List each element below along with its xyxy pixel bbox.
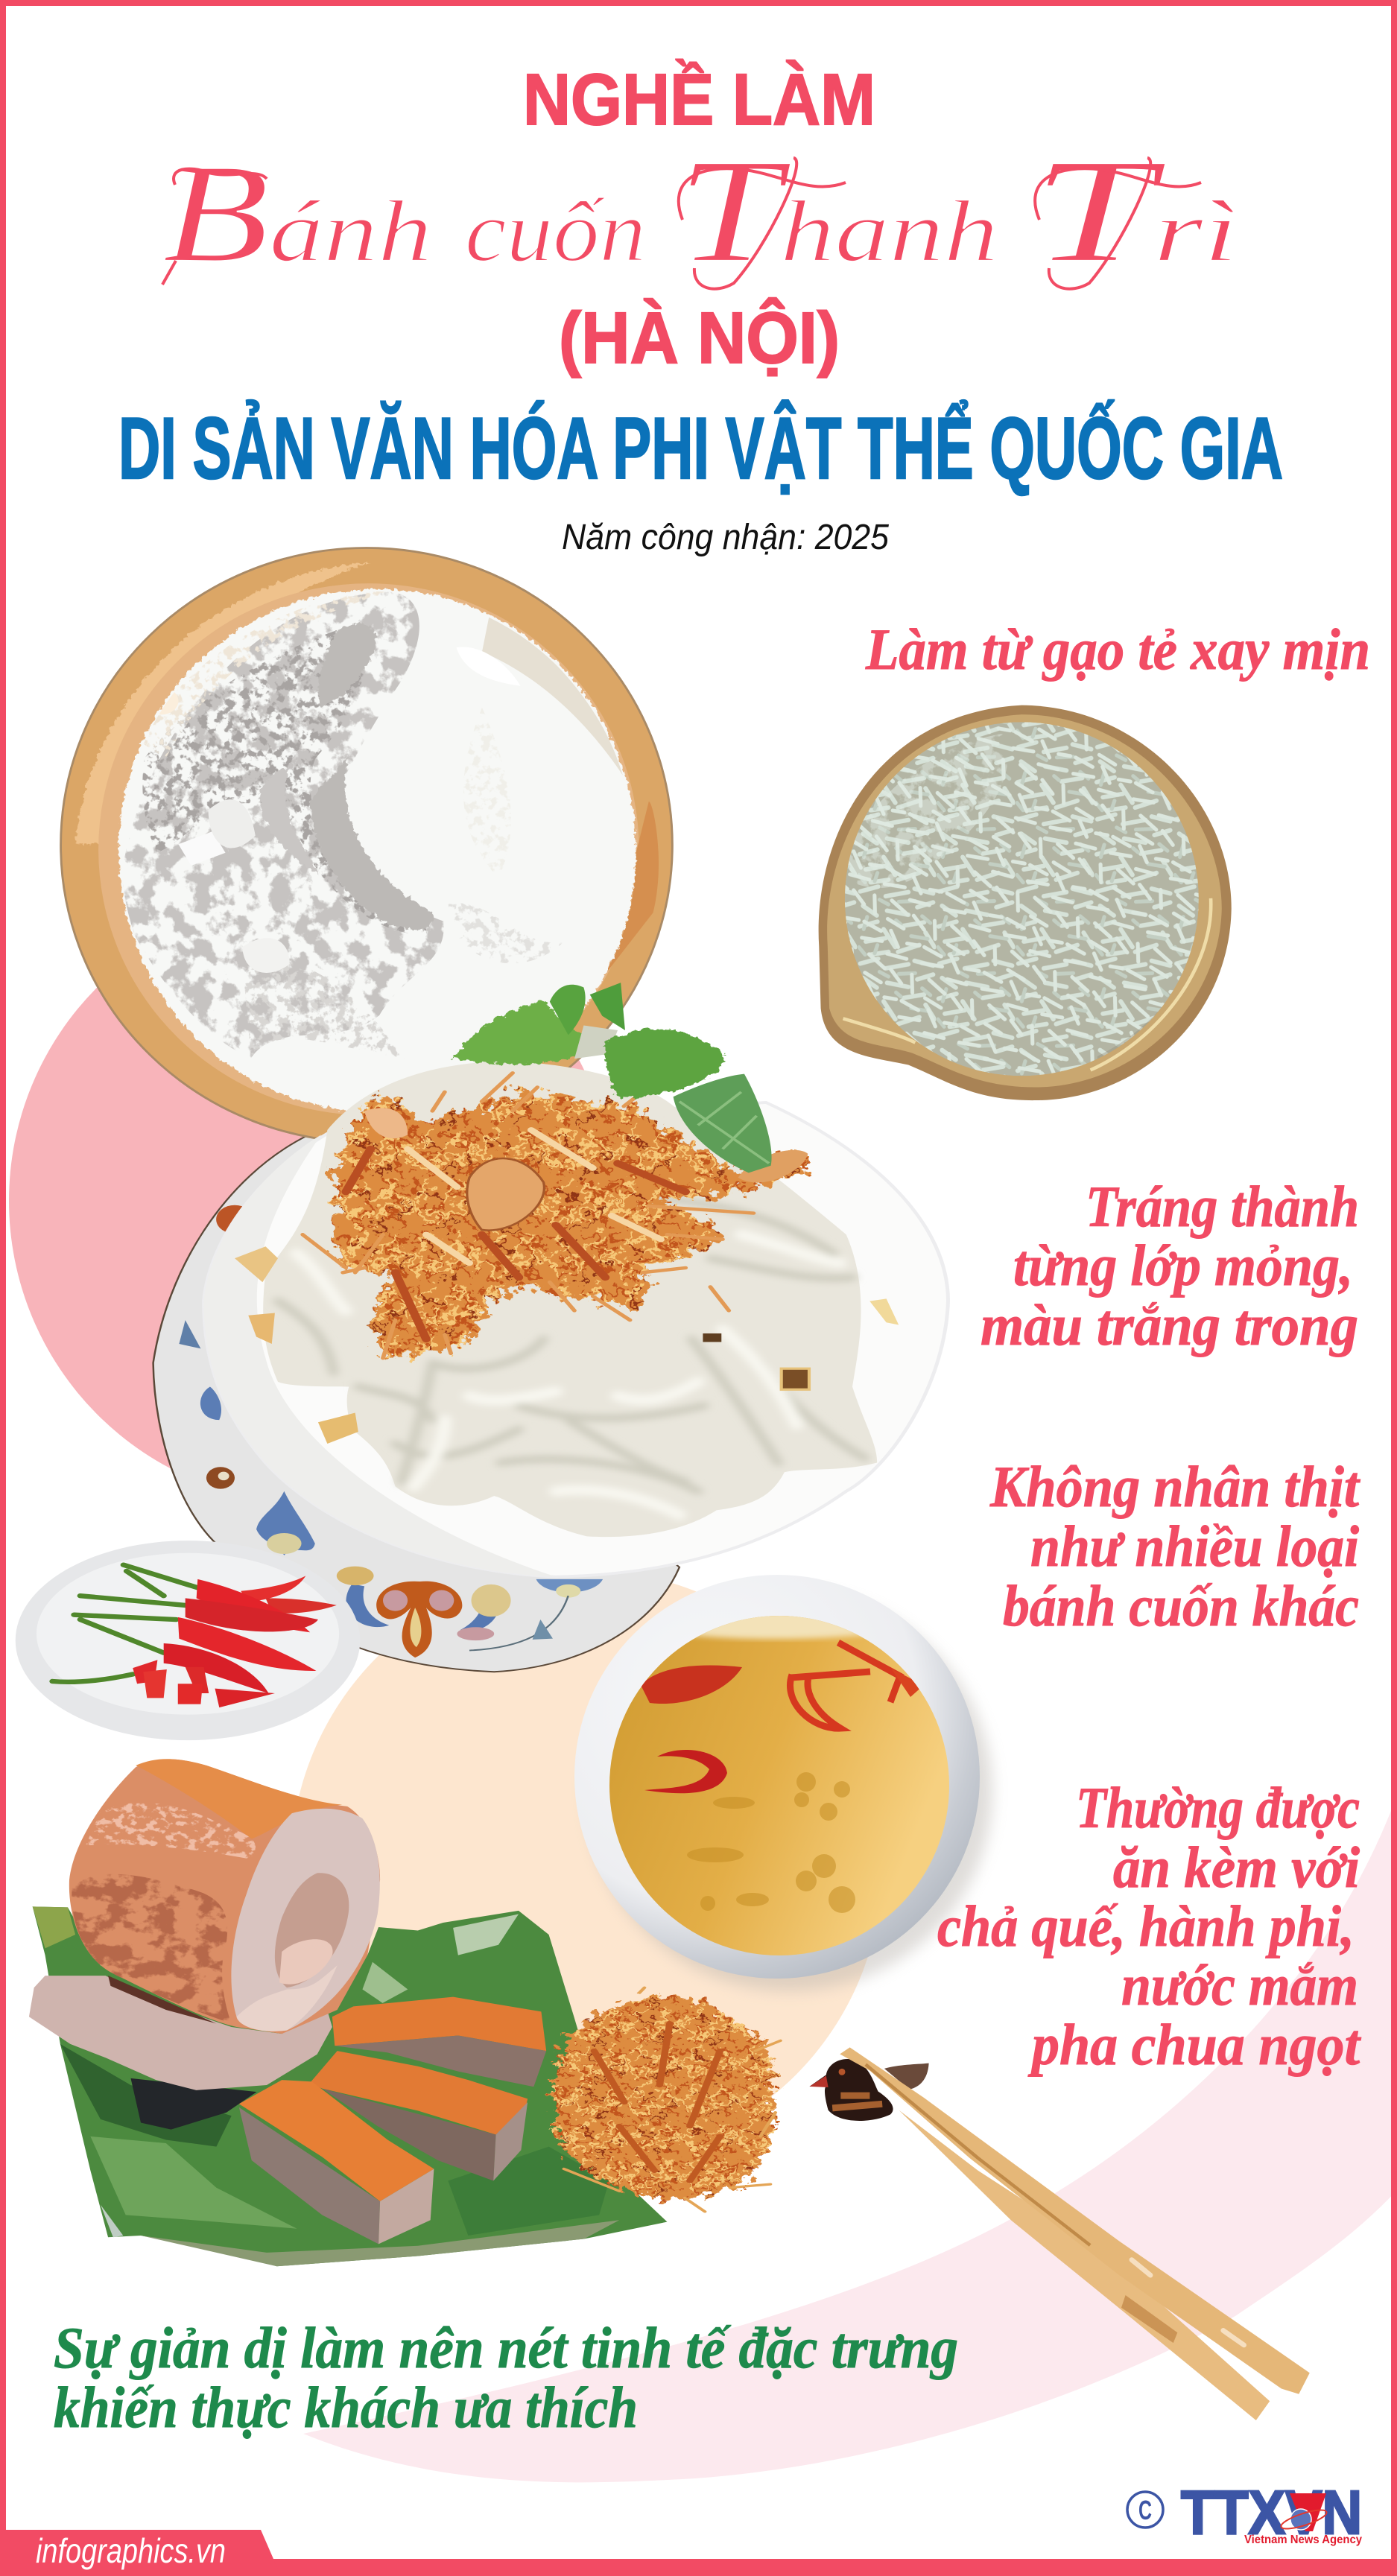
info label: no meat filling: bánh cuốn khác xyxy=(1003,1573,1359,1638)
chopstick rest and chopsticks xyxy=(809,2047,1310,2420)
fried shallots xyxy=(302,1073,806,1358)
script title: Bánh cuốn Thanh Trì: Thanh xyxy=(677,129,998,294)
info label: eaten with: ăn kèm với xyxy=(1113,1835,1360,1900)
banana leaf xyxy=(33,1906,667,2266)
chili plate xyxy=(16,1541,360,1740)
dipping sauce bowl xyxy=(574,1575,992,1991)
title line: Hà Nội: (HÀ NỘI) xyxy=(559,297,840,378)
fish sauce xyxy=(609,1616,949,1955)
background shape: peach circle xyxy=(291,1570,882,2162)
info label: thin layers xyxy=(981,1174,1359,1357)
info label: eaten with: pha chua ngọt xyxy=(1027,2012,1361,2077)
info label: eaten with: nước mắm xyxy=(1121,1952,1358,2017)
info label: eaten with: chả quế, hành phi, xyxy=(937,1894,1355,1958)
info label: no meat filling: Không nhân thịt xyxy=(989,1454,1360,1519)
info label: eaten with xyxy=(937,1775,1361,2077)
info label: rice: Làm từ gạo tẻ xay mịn xyxy=(865,617,1370,682)
agency wordmark: TTXVN xyxy=(1181,2478,1362,2547)
closing statement: khiến thực khách ưa thích xyxy=(54,2375,638,2440)
noodle rolls xyxy=(263,1061,877,1537)
duck rest xyxy=(809,2059,929,2121)
closing statement xyxy=(54,2315,958,2440)
roll body xyxy=(69,1759,380,2034)
copyright mark: C xyxy=(1138,2495,1152,2525)
garnish bits xyxy=(235,1150,899,1444)
fried shallots pile xyxy=(553,1987,781,2212)
script title: Bánh cuốn Thanh Trì xyxy=(162,129,1239,294)
background shape: pale pink crescent xyxy=(303,1795,1397,2482)
info label: thin layers: Tráng thành xyxy=(1086,1174,1359,1239)
rice bowl xyxy=(819,705,1232,1100)
website: infographics.vn xyxy=(36,2531,226,2570)
copyright mark xyxy=(1127,2492,1163,2528)
roll cut face xyxy=(231,1809,380,2031)
info label: eaten with: Thường được xyxy=(1076,1775,1360,1840)
script title: Bánh cuốn Thanh Trì: T rì xyxy=(1032,129,1239,294)
roll slice xyxy=(29,1976,332,2090)
info label: no meat filling xyxy=(989,1454,1360,1638)
logo: TTXVN xyxy=(1127,2478,1362,2547)
background shape: pink circle xyxy=(9,898,614,1503)
script title: Bánh cuốn Thanh Trì: cuốn xyxy=(465,183,646,280)
cake pieces xyxy=(239,1997,546,2244)
flour bowl xyxy=(61,548,672,1142)
script title: Bánh cuốn Thanh Trì: Bánh xyxy=(162,136,432,292)
chả quế on banana leaf xyxy=(29,1759,667,2266)
chilies xyxy=(52,1565,337,1707)
title line: Nghề làm: NGHỀ LÀM xyxy=(523,59,875,140)
plate motifs xyxy=(179,1205,603,1657)
closing statement: Sự giản dị làm nên nét tinh tế đặc trưng xyxy=(54,2315,958,2380)
rice grains xyxy=(843,722,1200,1076)
ornate plate xyxy=(153,1135,680,1672)
chopstick 2 xyxy=(899,2110,1270,2420)
chili slices xyxy=(641,1643,924,1793)
chopstick 1 xyxy=(840,2047,1310,2394)
agency name: Vietnam News Agency xyxy=(1244,2534,1362,2546)
info label: no meat filling: như nhiều loại xyxy=(1030,1514,1359,1579)
info label: thin layers: màu trắng trong xyxy=(981,1292,1358,1357)
info label: thin layers: từng lớp mỏng, xyxy=(1013,1233,1353,1298)
mint leaves xyxy=(453,983,772,1173)
recognition year: Năm công nhận: 2025 xyxy=(562,518,889,557)
white plate with bánh cuốn xyxy=(204,983,948,1577)
flour xyxy=(118,589,636,1112)
footer tab xyxy=(0,2530,281,2576)
